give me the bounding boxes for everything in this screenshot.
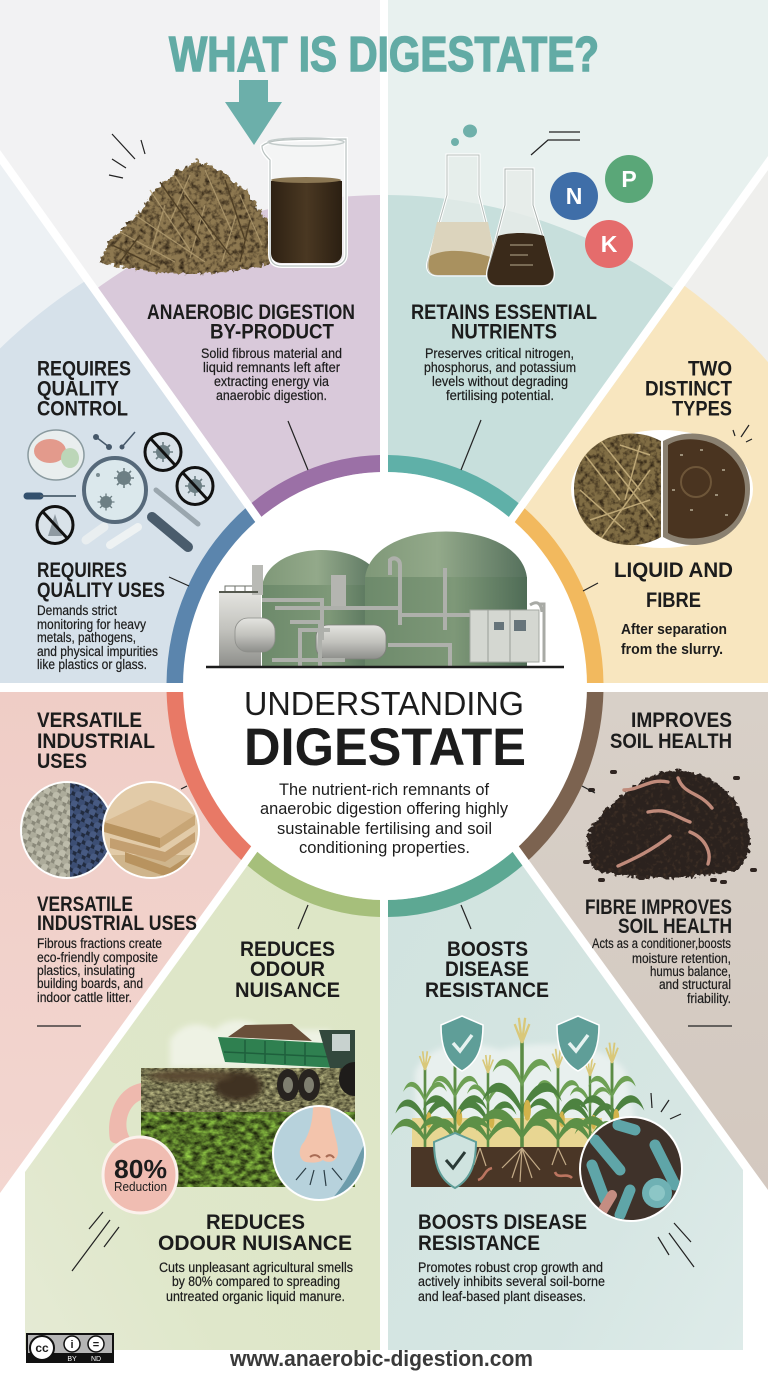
icon: tools and capsules (27, 490, 198, 545)
heading: TYPES (672, 398, 732, 420)
icon: N circle: N (566, 183, 582, 209)
body text: eco-friendly composite (37, 950, 158, 965)
icon: soil microbes circle (578, 1115, 684, 1223)
illustration: field and tractor spreader (141, 1020, 355, 1187)
licence badge: i (70, 1339, 74, 1351)
heading (425, 938, 549, 1002)
body text: liquid remnants left after (203, 360, 340, 375)
panel: improves soil health (518, 692, 768, 1190)
licence badge: BY (67, 1356, 77, 1363)
intro text: anaerobic digestion offering highly (260, 799, 508, 818)
body text: Solid fibrous material and (201, 346, 342, 361)
heading: understanding digestate: DIGESTATE (244, 718, 526, 777)
icon: shield (557, 1016, 599, 1071)
heading: BOOSTS DISEASE (418, 1211, 587, 1234)
heading: NUISANCE (235, 979, 340, 1002)
heading: TWO (688, 358, 732, 380)
panel: retains essential nutrients (388, 0, 768, 517)
body text: fertilising potential. (446, 388, 554, 403)
illustration: biogas plant (206, 532, 564, 667)
heading: VERSATILE (37, 709, 142, 732)
heading: REDUCES (206, 1211, 305, 1234)
icon: banned virus (145, 434, 181, 470)
heading (147, 301, 355, 344)
heading (158, 1211, 352, 1255)
icon: banned virus (177, 468, 213, 504)
heading: USES (37, 750, 87, 773)
heading: ODOUR NUISANCE (158, 1232, 352, 1255)
icon: boards circle (102, 781, 200, 879)
panel: boosts disease resistance (388, 852, 743, 1350)
icon: fibre and liquid circles (570, 428, 755, 550)
heading (37, 709, 155, 773)
heading: DISEASE (445, 958, 529, 981)
ticks (733, 425, 752, 442)
body text: Preserves critical nitrogen, (425, 346, 574, 361)
ticks (658, 1223, 694, 1267)
licence badge: cc (35, 1341, 49, 1355)
icon: P circle (605, 155, 653, 203)
heading: IMPROVES (631, 709, 732, 732)
heading: liquid and fibre: LIQUID AND (614, 559, 733, 582)
heading (645, 358, 732, 420)
icon: molecule and pipette (93, 432, 135, 450)
body text: friability. (687, 991, 731, 1006)
panel: requires quality control (0, 164, 256, 683)
icon: beaker of liquid (262, 138, 346, 266)
heading: ANAEROBIC DIGESTION (147, 301, 355, 324)
heading: QUALITY USES (37, 579, 165, 602)
body text: untreated organic liquid manure. (166, 1289, 345, 1304)
heading: INDUSTRIAL USES (37, 912, 197, 935)
body text: and structural (659, 977, 731, 992)
body text: monitoring for heavy (37, 617, 146, 632)
intro text: sustainable fertilising and soil (277, 819, 492, 838)
intro text: conditioning properties. (299, 838, 470, 857)
icon: banned impurity (37, 506, 73, 544)
callout tick (169, 577, 189, 586)
heading: VERSATILE (37, 893, 133, 916)
body text (424, 346, 576, 403)
motion ticks (109, 134, 145, 178)
heading (37, 559, 165, 602)
ticks (651, 1093, 681, 1119)
icon: bubbles (451, 124, 477, 146)
icon: nose circle (272, 1105, 366, 1201)
heading: NUTRIENTS (451, 320, 557, 344)
body text: Demands strict (37, 603, 117, 618)
licence badge: = (93, 1339, 99, 1351)
heading: REDUCES (240, 938, 335, 961)
body text (621, 622, 727, 658)
ticks (72, 1212, 119, 1271)
callout tick (181, 786, 187, 789)
heading: BOOSTS (447, 938, 528, 961)
body text: levels without degrading (432, 374, 568, 389)
body text (418, 1260, 605, 1304)
icon: fibre pile (100, 160, 274, 273)
panel: anaerobic digestion by-product (0, 0, 380, 517)
heading (37, 358, 131, 420)
body text: phosphorus, and potassium (424, 360, 576, 375)
callout: 80% reduction: 80% (114, 1154, 167, 1184)
intro text (260, 780, 508, 857)
title: WHAT IS DIGESTATE? (169, 28, 599, 82)
body text: moisture retention, (632, 951, 731, 966)
body text (592, 936, 731, 1006)
body text: indoor cattle litter. (37, 990, 132, 1005)
arrow: down to beaker (225, 80, 282, 145)
icon: flasks (427, 155, 553, 285)
heading (418, 1211, 587, 1255)
heading: CONTROL (37, 398, 128, 420)
intro text: The nutrient-rich remnants of (279, 780, 489, 799)
heading: REQUIRES (37, 358, 131, 380)
illustration: corn crop and soil (391, 1018, 649, 1187)
heading: liquid and fibre (614, 559, 733, 612)
body text: Acts as a conditioner,boosts (592, 936, 731, 951)
heading (235, 938, 340, 1002)
body text: Promotes robust crop growth and (418, 1260, 603, 1275)
body text (201, 346, 342, 403)
heading: RESISTANCE (425, 979, 549, 1002)
icon: N circle (550, 172, 598, 220)
icon: K circle (585, 220, 633, 268)
panel: reduces odour nuisance (25, 852, 380, 1350)
heading: BY-PRODUCT (210, 320, 334, 344)
heading: INDUSTRIAL (37, 730, 155, 753)
callout tick (288, 421, 308, 470)
icon: soil pile with worms (585, 770, 755, 882)
icon: shield (441, 1016, 483, 1071)
body text: Cuts unpleasant agricultural smells (159, 1260, 353, 1275)
heading: SOIL HEALTH (610, 730, 732, 753)
body text: After separation (621, 622, 727, 638)
body text: like plastics or glass. (37, 657, 147, 672)
icon: petri dish (28, 430, 84, 480)
heading (37, 893, 197, 935)
heading: fibre improves soil health: FIBRE IMPROVES (585, 896, 732, 919)
body text: and physical impurities (37, 644, 158, 659)
heading: understanding digestate: UNDERSTANDING (244, 685, 524, 722)
body text: and leaf-based plant diseases. (418, 1289, 586, 1304)
panel: two distinct types (514, 170, 768, 683)
licence badge: ND (91, 1356, 101, 1363)
body text (37, 603, 158, 672)
body text: extracting energy via (214, 374, 329, 389)
heading: DISTINCT (645, 378, 732, 400)
heading: REQUIRES (37, 559, 127, 582)
licence badge (26, 1333, 114, 1363)
heading (610, 709, 732, 753)
heading: liquid and fibre: FIBRE (646, 589, 701, 612)
callout lines (531, 132, 580, 155)
body text: anaerobic digestion. (216, 388, 327, 403)
body text: plastics, insulating (37, 963, 135, 978)
heading: fibre improves soil health (585, 896, 732, 938)
body text: metals, pathogens, (37, 630, 136, 645)
heading: fibre improves soil health: SOIL HEALTH (618, 915, 732, 938)
heading: RESISTANCE (418, 1232, 540, 1255)
body text: from the slurry. (621, 642, 723, 658)
icon: shield on soil (434, 1133, 476, 1188)
body text: Fibrous fractions create (37, 936, 162, 951)
heading (411, 301, 597, 344)
callout tick (583, 583, 598, 591)
icon: magnifying glass (84, 458, 188, 547)
body text: humus balance, (650, 964, 731, 979)
body text: by 80% compared to spreading (172, 1274, 340, 1289)
arrow: reduction swoosh (109, 1083, 141, 1143)
website url: www.anaerobic-digestion.com (229, 1346, 533, 1371)
callout tick (461, 420, 481, 470)
callout: 80% reduction (103, 1137, 177, 1213)
body text (159, 1260, 353, 1304)
heading: ODOUR (250, 958, 325, 981)
callout tick (298, 905, 308, 929)
icon: pellets circle (20, 780, 114, 880)
body text (37, 936, 162, 1005)
icon: P circle: P (621, 166, 637, 192)
heading: RETAINS ESSENTIAL (411, 301, 597, 324)
body text: actively inhibits several soil-borne (418, 1274, 605, 1289)
callout tick (582, 786, 595, 793)
callout tick (461, 905, 471, 929)
panel: versatile industrial uses (0, 692, 252, 1193)
central circle (183, 472, 587, 900)
body text: building boards, and (37, 976, 143, 991)
callout: 80% reduction: Reduction (114, 1179, 167, 1194)
heading: QUALITY (37, 378, 119, 400)
icon: K circle: K (601, 231, 618, 257)
heading: understanding digestate (244, 685, 526, 777)
